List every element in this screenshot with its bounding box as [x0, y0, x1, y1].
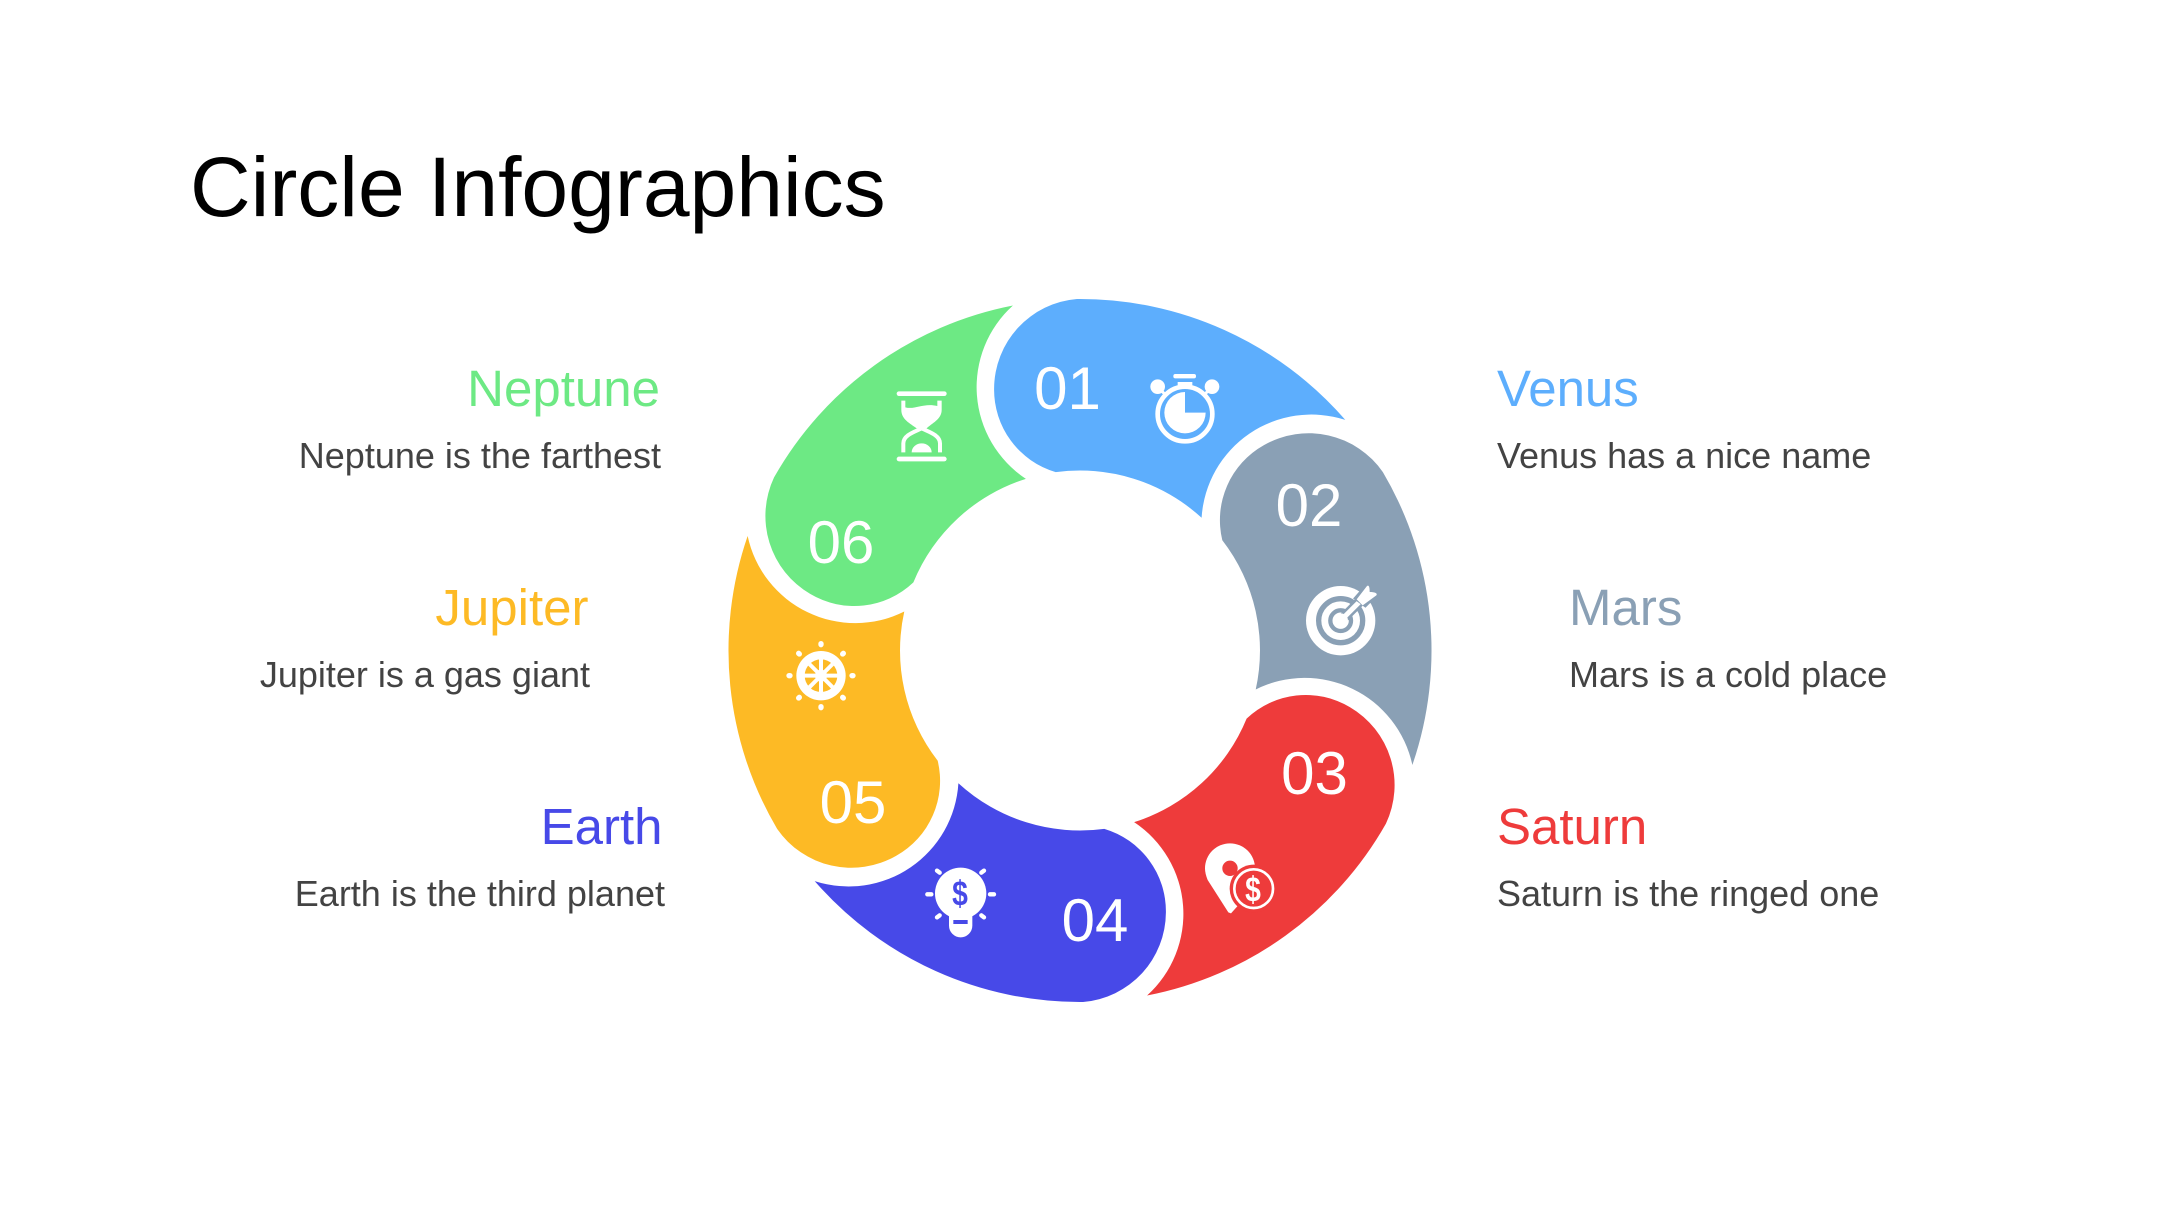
label: Saturn — [1497, 798, 1879, 914]
label: Venus — [1497, 360, 1871, 476]
segment 02: Mars — [1152, 400, 1517, 814]
icon: ship wheel — [789, 644, 853, 708]
icon: light bulb with dollar — [927, 868, 994, 937]
label: Saturn: Saturn — [1497, 798, 1647, 855]
icon: location pin with dollar — [1205, 843, 1278, 913]
label: Mars — [1569, 579, 1887, 695]
icon: target with arrow — [1306, 585, 1377, 655]
label: Neptune: Neptune — [467, 360, 660, 417]
number 01: 01 — [1034, 355, 1101, 422]
icon: light bulb with dollar: $ — [952, 874, 968, 913]
icon: location pin with dollar: $ — [1245, 869, 1261, 909]
segment 04: Earth — [815, 783, 1166, 1002]
label: Earth: Earth — [541, 798, 662, 855]
label: Neptune — [299, 360, 661, 476]
label: Jupiter: Jupiter — [435, 579, 589, 636]
number 05: 05 — [820, 769, 886, 836]
label: Venus: Venus — [1497, 360, 1639, 417]
segment 01: Venus — [994, 299, 1345, 518]
icon: stopwatch — [1150, 374, 1219, 441]
number 06: 06 — [808, 509, 874, 576]
segment 03: Saturn — [1062, 642, 1427, 1056]
label: Earth — [295, 798, 665, 914]
number 03: 03 — [1281, 740, 1348, 807]
icon: hourglass — [897, 391, 947, 461]
segment 05: Jupiter — [643, 487, 1008, 901]
label: Mars: Mars — [1569, 579, 1682, 636]
segment 06: Neptune — [733, 245, 1098, 659]
label: Mars: Mars is a cold place — [1569, 654, 1887, 695]
label: Jupiter: Jupiter is a gas giant — [260, 654, 590, 695]
label: Earth: Earth is the third planet — [295, 873, 665, 914]
number 04: 04 — [1062, 887, 1128, 954]
label: Venus: Venus has a nice name — [1497, 435, 1871, 476]
label: Neptune: Neptune is the farthest — [299, 435, 661, 476]
label: Saturn: Saturn is the ringed one — [1497, 873, 1879, 914]
number 02: 02 — [1276, 472, 1342, 539]
label: Jupiter — [260, 579, 590, 695]
title: Circle Infographics — [190, 140, 886, 234]
